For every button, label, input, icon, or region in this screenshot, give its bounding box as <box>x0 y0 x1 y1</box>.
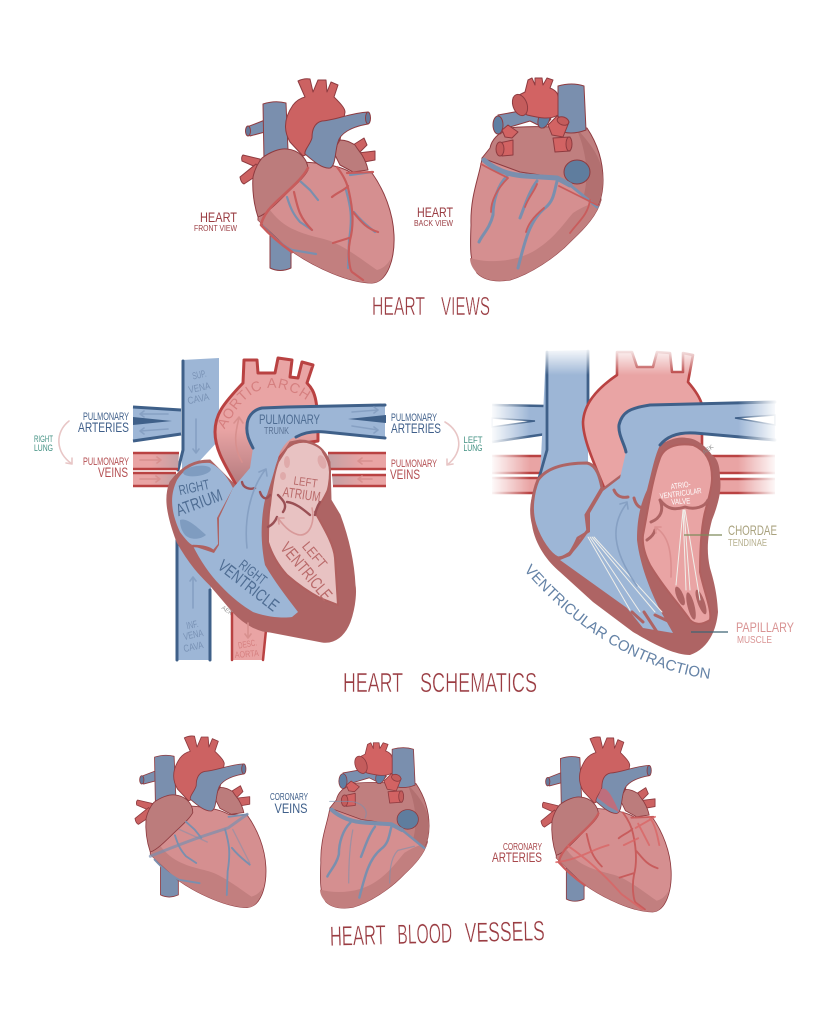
aorta <box>583 352 702 490</box>
right ventricle label: VENTRICLE <box>214 556 283 615</box>
label: pulmonary veins, right side: PULMONARY <box>391 458 437 470</box>
label: pulmonary veins, left side: VEINS <box>98 464 128 480</box>
label: heart back view: BACK VIEW <box>414 219 453 228</box>
title: heart blood vessels <box>329 915 545 952</box>
arteries on front <box>556 789 659 909</box>
label: heart front view: HEART <box>200 209 237 225</box>
label: pulmonary arteries, right side <box>391 412 441 436</box>
label: pulmonary arteries, left side: PULMONARY <box>83 411 129 423</box>
pulmonary veins, right lung side <box>133 453 179 486</box>
pulmonary trunk label: TRUNK <box>264 426 289 437</box>
veins on front <box>150 814 250 895</box>
label: right lung: RIGHT <box>34 434 53 444</box>
callout: papillary muscle: MUSCLE <box>737 635 772 646</box>
superior vena cava <box>182 358 219 480</box>
left atrium label <box>282 473 322 505</box>
title: heart views: HEART <box>372 291 425 321</box>
label: coronary arteries: CORONARY <box>503 842 542 853</box>
left pulmonary veins <box>328 453 386 486</box>
label: left lung: LUNG <box>464 443 482 453</box>
signature mark: AEK <box>220 605 233 617</box>
left atrium label: ATRIUM <box>282 483 322 505</box>
right atrium <box>532 463 602 558</box>
vessel labels <box>183 369 212 655</box>
valve label <box>659 480 702 507</box>
label: pulmonary veins, left side: PULMONARY <box>83 456 129 468</box>
vessel labels: SUP. <box>191 369 207 382</box>
label: coronary arteries: ARTERIES <box>492 849 542 865</box>
pulmonary trunk dark edges and fork <box>247 405 385 448</box>
heart front view <box>240 79 394 283</box>
papillary muscles, right <box>632 612 670 632</box>
pulmonary arteries, right lung side <box>133 407 181 441</box>
coronary vessels, front <box>261 167 378 280</box>
schematic: heart labelled <box>132 356 386 662</box>
left pulmonary veins, faded <box>492 456 544 493</box>
label: heart back view: HEART <box>417 204 453 220</box>
valve label: VALVE <box>671 496 691 507</box>
label: heart back view <box>414 204 453 228</box>
blood flow arrows <box>140 407 378 638</box>
atrium inner shading <box>180 464 212 539</box>
label: pulmonary veins, right side <box>390 458 437 482</box>
schematic: ventricular contraction heart <box>490 347 778 655</box>
callout: papillary muscle <box>691 619 795 646</box>
right atrium label: ATRIUM <box>173 486 225 520</box>
label: coronary veins: CORONARY <box>270 792 308 803</box>
superior vena cava <box>540 350 588 480</box>
valve label: ATRIO- <box>670 480 691 491</box>
heart back view <box>470 78 603 281</box>
pulmonary trunk label <box>259 411 320 437</box>
heart: coronary veins back view <box>320 743 429 908</box>
vessel labels: INF. <box>185 619 199 632</box>
left heart chambers <box>268 442 338 605</box>
label: right lung: LUNG <box>34 443 53 453</box>
descending aorta label: AORTA <box>234 648 259 660</box>
right atrium <box>172 463 233 550</box>
right pulmonary veins, faded <box>712 456 775 493</box>
label: coronary veins <box>270 792 308 816</box>
left atrium label: LEFT <box>293 473 319 491</box>
left ventricle label <box>276 538 336 604</box>
arrow: left lung curve <box>445 422 459 465</box>
arrow: right lung curve <box>59 421 72 464</box>
callout: chordae tendinae: TENDINAE <box>728 538 767 549</box>
aortic arch label: AORTIC ARCH <box>218 378 310 429</box>
left ventricle label: LEFT <box>299 538 331 572</box>
valves <box>558 490 708 558</box>
label: pulmonary arteries, right side: PULMONARY <box>391 412 437 424</box>
right ventricle label <box>214 556 283 615</box>
title: heart schematics <box>343 667 537 698</box>
callout: chordae tendinae: CHORDAE <box>728 522 777 538</box>
descending aorta <box>232 612 266 660</box>
label: pulmonary veins, right side: VEINS <box>390 466 420 482</box>
label: left lung <box>464 435 483 453</box>
callout: chordae tendinae <box>684 522 777 549</box>
edge fades <box>490 347 778 496</box>
label: pulmonary arteries, right side: ARTERIES <box>391 420 441 436</box>
title: heart views: VIEWS <box>441 291 490 321</box>
papillary muscles, left <box>673 585 709 620</box>
right ventricle and pulmonary trunk <box>560 402 775 633</box>
veins on back <box>327 801 424 898</box>
pulmonary trunk dark edges and fork <box>619 402 775 452</box>
label: ventricular contraction: VENTRICULAR CONTRACTION <box>526 563 710 679</box>
chordae tendinae strings <box>588 510 700 612</box>
flow arrows <box>616 502 671 586</box>
signature mark: AEK <box>702 444 715 456</box>
vessel labels: CAVA <box>183 640 205 655</box>
vessel labels: VENA <box>183 628 205 643</box>
valve label: VENTRICULAR <box>659 486 702 501</box>
heart muscle wall <box>167 440 355 642</box>
heart valves <box>242 482 320 527</box>
label: left lung: LEFT <box>464 435 483 445</box>
atrial wall spots <box>280 454 328 480</box>
title: heart schematics: SCHEMATICS <box>420 667 537 698</box>
title: heart blood vessels: VESSELS <box>464 915 545 948</box>
vessel labels: VENA <box>188 381 212 396</box>
title: heart blood vessels: BLOOD <box>397 918 453 950</box>
label: pulmonary arteries, left side <box>78 411 129 435</box>
descending aorta label <box>234 637 259 660</box>
inferior vena cava <box>176 530 211 660</box>
pulmonary trunk label: PULMONARY <box>259 411 320 427</box>
label: coronary veins: VEINS <box>274 800 308 816</box>
descending aorta label: DESC. <box>237 637 258 651</box>
right ventricle and pulmonary trunk <box>193 405 385 617</box>
label: heart front view <box>194 209 237 233</box>
right ventricle label: RIGHT <box>236 556 270 588</box>
left ventricle label: VENTRICLE <box>276 539 336 604</box>
aortic arch <box>215 358 318 488</box>
label: pulmonary arteries, left side: ARTERIES <box>78 419 129 435</box>
coronary vessels, back <box>479 160 597 268</box>
title: heart schematics: HEART <box>343 667 403 698</box>
left pulmonary arteries, faded <box>492 405 546 442</box>
vessel labels: CAVA <box>187 392 211 407</box>
right atrium label: RIGHT <box>177 476 211 498</box>
heart muscle wall <box>530 437 721 655</box>
callout: papillary muscle: PAPILLARY <box>736 619 795 635</box>
label: right lung <box>34 434 53 453</box>
heart: coronary arteries <box>541 737 671 912</box>
label: heart front view: FRONT VIEW <box>194 224 237 233</box>
label: pulmonary veins, left side <box>83 456 129 480</box>
left atrium and ventricle <box>643 444 712 624</box>
label: coronary arteries <box>492 842 542 865</box>
title: heart blood vessels: HEART <box>329 919 386 952</box>
septum between right atrium and ventricle <box>193 546 213 551</box>
heart: coronary veins front view <box>135 736 266 908</box>
